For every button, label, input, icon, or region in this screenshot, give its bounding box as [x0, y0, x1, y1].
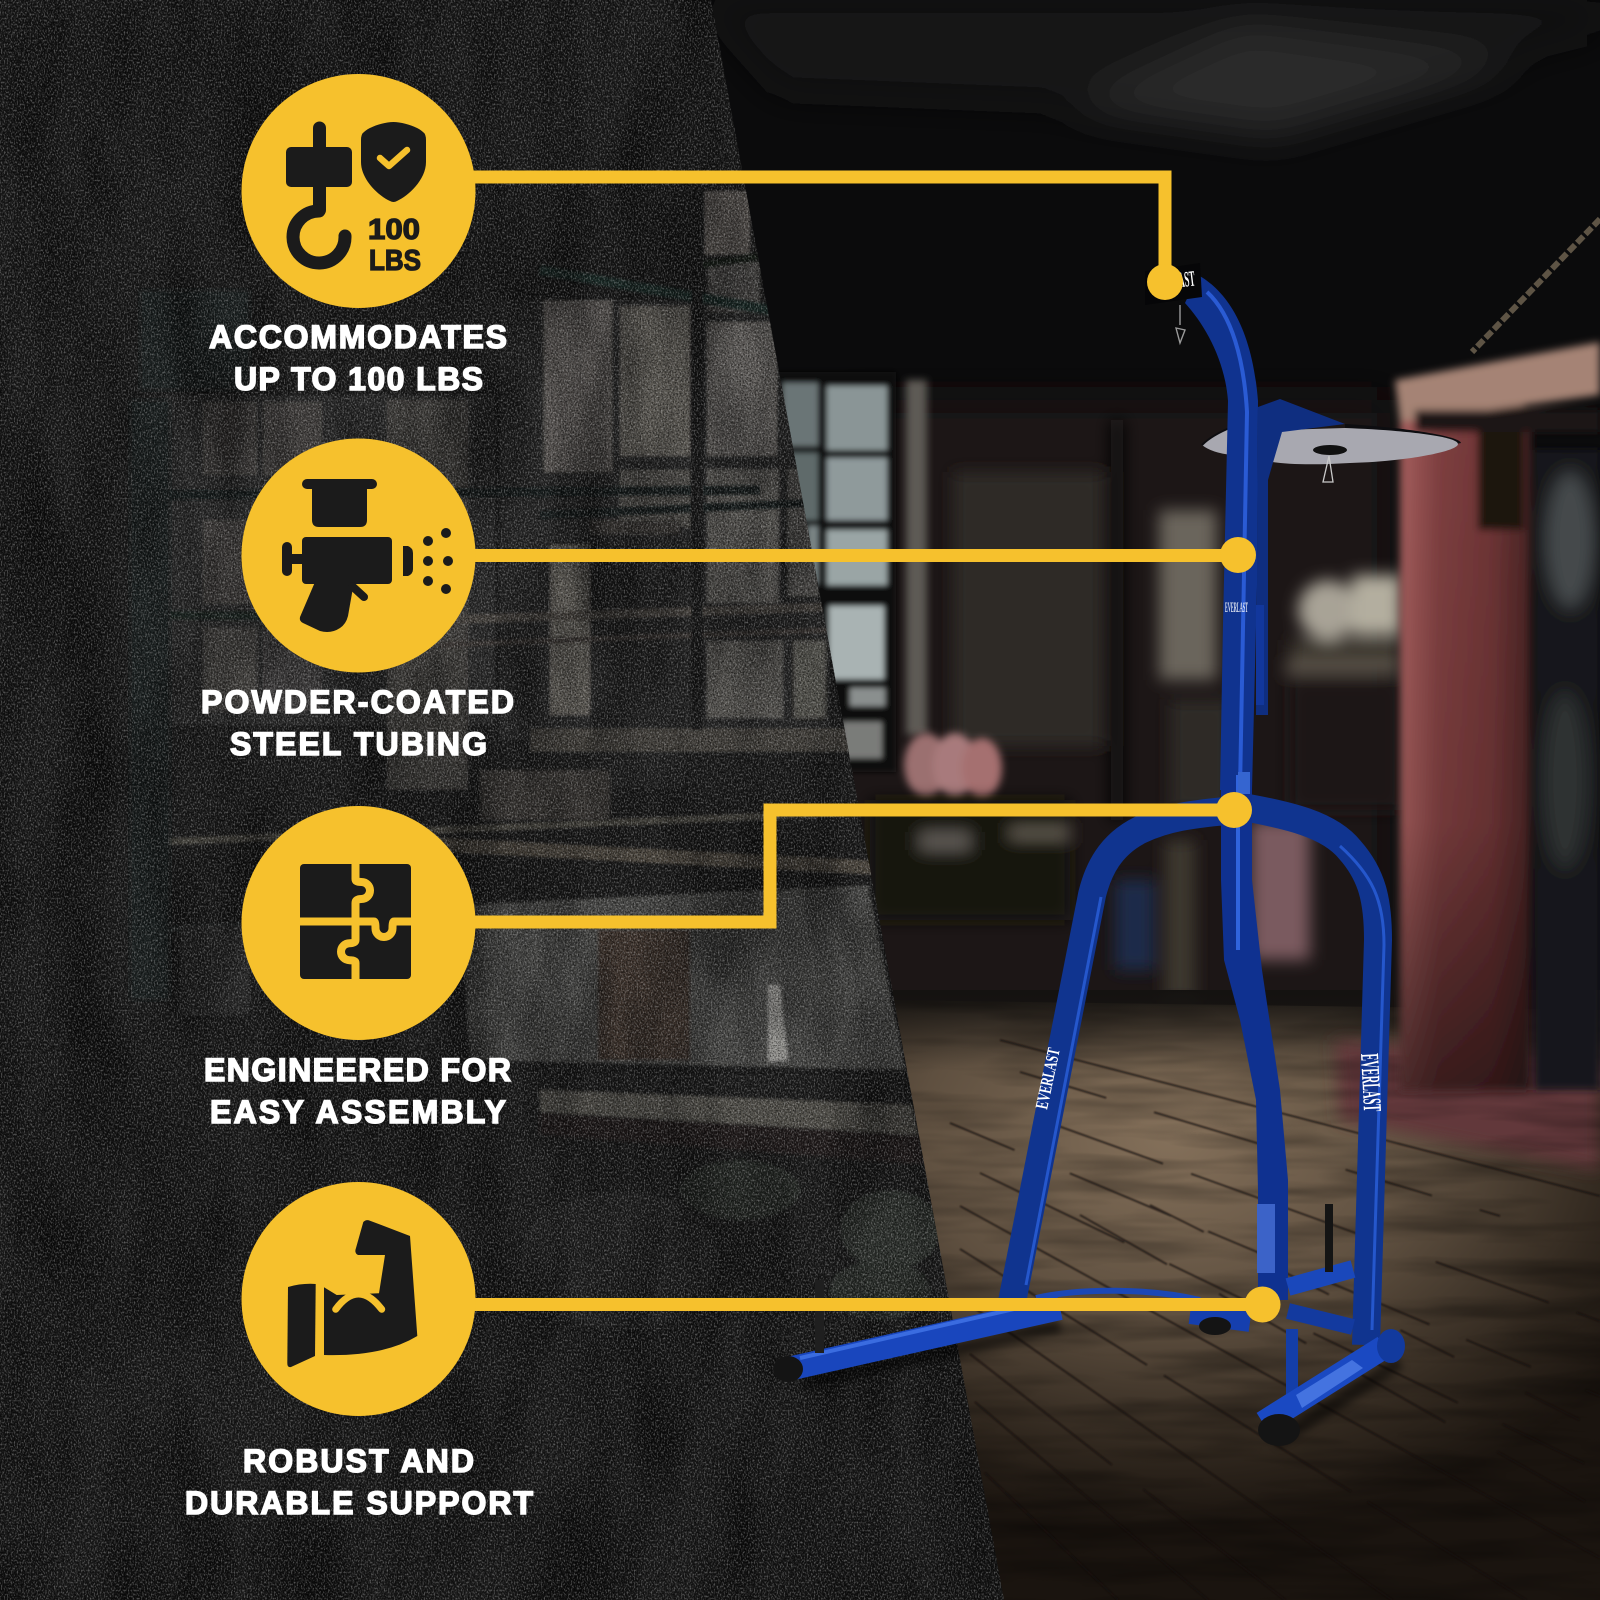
- upper pole: [1185, 275, 1258, 790]
- floor plank cracks: [950, 1040, 1600, 1600]
- dark door panel: [953, 420, 1124, 820]
- label: [209, 319, 507, 397]
- label: [185, 1443, 533, 1521]
- punching bag: [1395, 342, 1600, 1090]
- leg logos: EVERLAST: [1031, 1046, 1064, 1111]
- feature 2: powder coating: [201, 438, 514, 762]
- connector lines and end dots: [470, 177, 1280, 1322]
- circle badge: [242, 438, 476, 672]
- rubber caps and weight pegs: [773, 1204, 1333, 1446]
- icon text: 100 LBS: 100: [368, 214, 420, 246]
- ring ropes: [160, 190, 880, 930]
- blurred shelves and objects: [1159, 510, 1402, 810]
- lower ring canvas: [130, 400, 940, 1330]
- label: [201, 684, 514, 762]
- background: gym photo: [745, 3, 1600, 1600]
- mottled blotches: [0, 0, 1010, 1600]
- line: load capacity: [470, 177, 1183, 300]
- gloves: [870, 733, 1070, 920]
- label: ROBUST AND: [243, 1443, 474, 1479]
- right leg: [1237, 806, 1378, 1345]
- label: DURABLE SUPPORT: [185, 1485, 533, 1521]
- bag stand product: EVERLAST: [1148, 266, 1196, 296]
- bag stand product: EVERLAST: [1355, 1053, 1387, 1112]
- line: powder coating: [470, 537, 1256, 573]
- lower center pole: [1221, 780, 1288, 1300]
- top hook and tag: [1145, 263, 1202, 343]
- back wall: [830, 400, 1390, 1040]
- line: assembly: [470, 792, 1252, 922]
- label: [204, 1052, 511, 1130]
- feature 3: assembly: [204, 806, 511, 1130]
- icon: spray gun: [282, 479, 453, 632]
- bag chain: [1472, 219, 1600, 352]
- bag stand product: EVERLAST: [1225, 600, 1248, 616]
- faded boxing ring window panes: [140, 191, 830, 790]
- label: EASY ASSEMBLY: [210, 1094, 506, 1130]
- base rails: [788, 1269, 1405, 1423]
- window: [772, 372, 896, 772]
- label: STEEL TUBING: [230, 726, 487, 762]
- icon: hook: [286, 128, 352, 263]
- contact shadows under the base: [800, 1326, 1400, 1442]
- icon text: 100 LBS: LBS: [369, 245, 421, 277]
- line: support: [470, 1286, 1280, 1322]
- grain texture: [0, 0, 1010, 1600]
- rear bracket post: [1256, 399, 1345, 715]
- circle badge: [242, 74, 476, 308]
- left leg: [1012, 810, 1237, 1302]
- pink and blue blurred items behind stand: [1115, 820, 1310, 1000]
- ceiling shading: [700, 0, 1600, 137]
- circle badge: [242, 806, 476, 1040]
- icon: flexed arm: [287, 1220, 417, 1367]
- feature 1: capacity: [209, 74, 507, 397]
- speed bag platform: [1202, 424, 1461, 482]
- panel: textured left overlay with faded boxing ring: [0, 0, 1010, 1600]
- curtain strip: [906, 380, 927, 735]
- icon text: 100 LBS: [368, 214, 421, 277]
- red floor rug and floor: [860, 990, 1600, 1600]
- icon: puzzle: [296, 860, 415, 984]
- bag stand product: [773, 263, 1461, 1446]
- label: UP TO 100 LBS: [234, 361, 483, 397]
- label: ACCOMMODATES: [209, 319, 507, 355]
- icon: shield with check: [361, 122, 426, 202]
- label: ENGINEERED FOR: [204, 1052, 511, 1088]
- label: POWDER-COATED: [201, 684, 514, 720]
- circle badge: [242, 1182, 476, 1416]
- feature 4: support: [185, 1182, 533, 1521]
